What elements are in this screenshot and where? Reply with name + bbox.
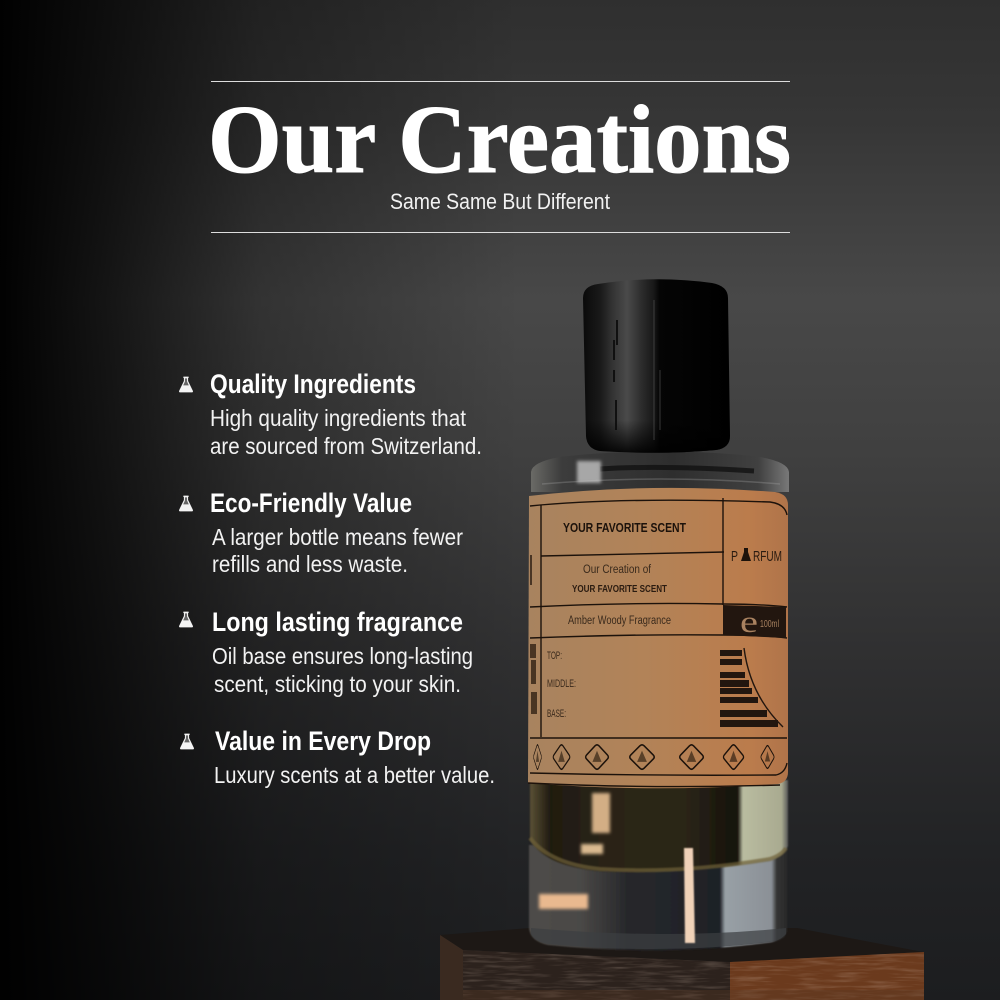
feature: eco-friendly value: refills and less waste. [212,551,408,577]
icon: flask [179,496,193,511]
header: title block [208,81,791,233]
glass rim curve [530,838,786,870]
feature: eco-friendly value: Eco-Friendly Value [210,488,412,518]
glass base [529,845,787,950]
icon: flask [179,377,193,392]
side panel print [530,555,537,714]
notes labels: MIDDLE: [547,678,576,690]
subtitle: Same Same But Different [390,189,610,214]
volume text: 100ml [760,619,779,630]
feature: eco-friendly value: A larger bottle means fewer [212,524,463,550]
creation scent: YOUR FAVORITE SCENT [572,584,667,595]
feature: value in every drop: Value in Every Drop [215,726,431,756]
kraft label [528,488,788,788]
feature: value in every drop: Luxury scents at a better value. [214,762,495,788]
scent name: YOUR FAVORITE SCENT [563,520,686,535]
light reflections [539,793,695,943]
volume panel [723,605,786,638]
brand RFUM: RFUM [753,548,782,565]
feature: quality ingredients: Quality Ingredients [210,369,416,399]
wooden block [440,928,924,1000]
feature: long lasting fragrance: scent, sticking to your skin. [214,671,461,697]
feature list [179,369,495,788]
label border lines [528,498,787,787]
notes labels: BASE: [547,708,566,720]
notes pyramid [720,648,783,727]
bottle cap [583,279,730,453]
icon: flask [180,734,194,749]
volume symbol: e [740,604,758,639]
title: Our Creations [208,86,791,194]
icon: flask [179,612,193,627]
feature: quality ingredients [179,369,482,459]
fragrance type: Amber Woody Fragrance [568,615,671,627]
feature: long lasting fragrance [179,607,473,697]
brand P: P [731,548,738,565]
creation line: Our Creation of [583,564,652,576]
perfume bottle [528,279,789,950]
feature: long lasting fragrance: Long lasting fragrance [212,607,463,637]
base bottom edge [531,928,786,949]
care icons row [534,745,774,769]
brand flask [741,548,751,561]
feature: quality ingredients: High quality ingredients that [210,405,467,431]
notes labels: TOP: [547,650,562,662]
feature: eco-friendly value [179,488,463,577]
bottle shoulder [531,451,789,492]
feature: value in every drop [180,726,495,788]
feature: quality ingredients: are sourced from Switzerland. [210,433,482,459]
notes labels [547,650,576,720]
liquid [530,780,788,872]
feature: long lasting fragrance: Oil base ensures long-lasting [212,643,473,669]
